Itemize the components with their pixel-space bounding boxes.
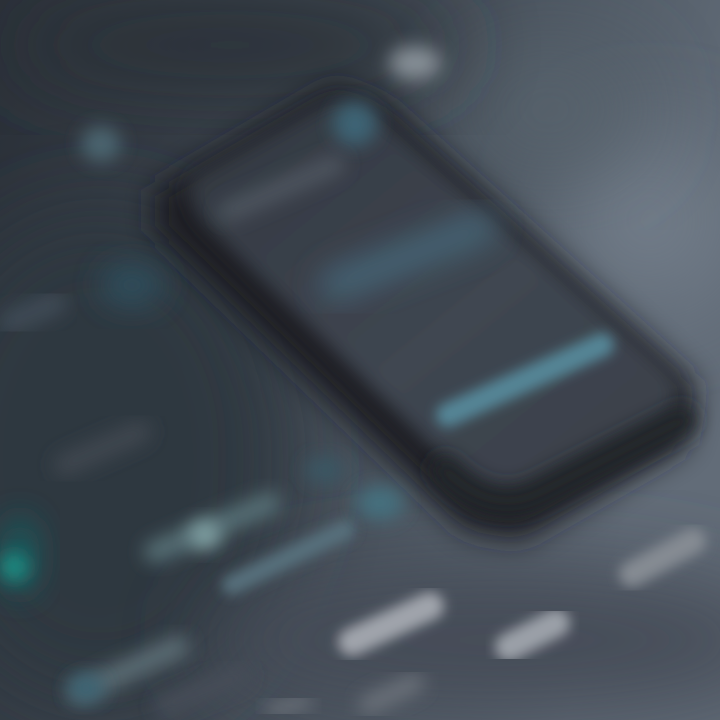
white pill three [632, 541, 693, 574]
phone body [189, 99, 679, 496]
row four pill [165, 676, 240, 706]
screen button: bright blue bar [448, 345, 602, 415]
bright teal dot [0, 553, 28, 581]
mid grey label [65, 432, 140, 465]
row three teal end [68, 674, 104, 702]
faint bottom pill [368, 683, 415, 705]
white pill two [509, 623, 556, 647]
teal glow icon [0, 515, 40, 595]
faint bottom left pill [272, 702, 305, 710]
row one teal icon [305, 456, 345, 484]
row one pill [155, 503, 270, 552]
phone bottom dark edge [445, 420, 682, 501]
white pill one [352, 606, 430, 642]
icon: top left blurred dot [81, 126, 121, 162]
row three pill [80, 647, 178, 692]
phone shadow: dark lower left edge [155, 85, 695, 540]
row two teal icon [356, 486, 404, 520]
row two pill [232, 530, 345, 585]
row one bright dot [189, 521, 221, 549]
icon: top blurred light dot [389, 46, 441, 80]
left label bar [10, 303, 55, 322]
left interface elements [0, 263, 404, 706]
screen line: top heading [228, 165, 335, 212]
left teal icon [100, 263, 164, 307]
right interface pills [272, 541, 693, 710]
screen line: teal chart [335, 228, 480, 285]
phone status notch [333, 102, 377, 146]
smartphone [155, 85, 695, 540]
